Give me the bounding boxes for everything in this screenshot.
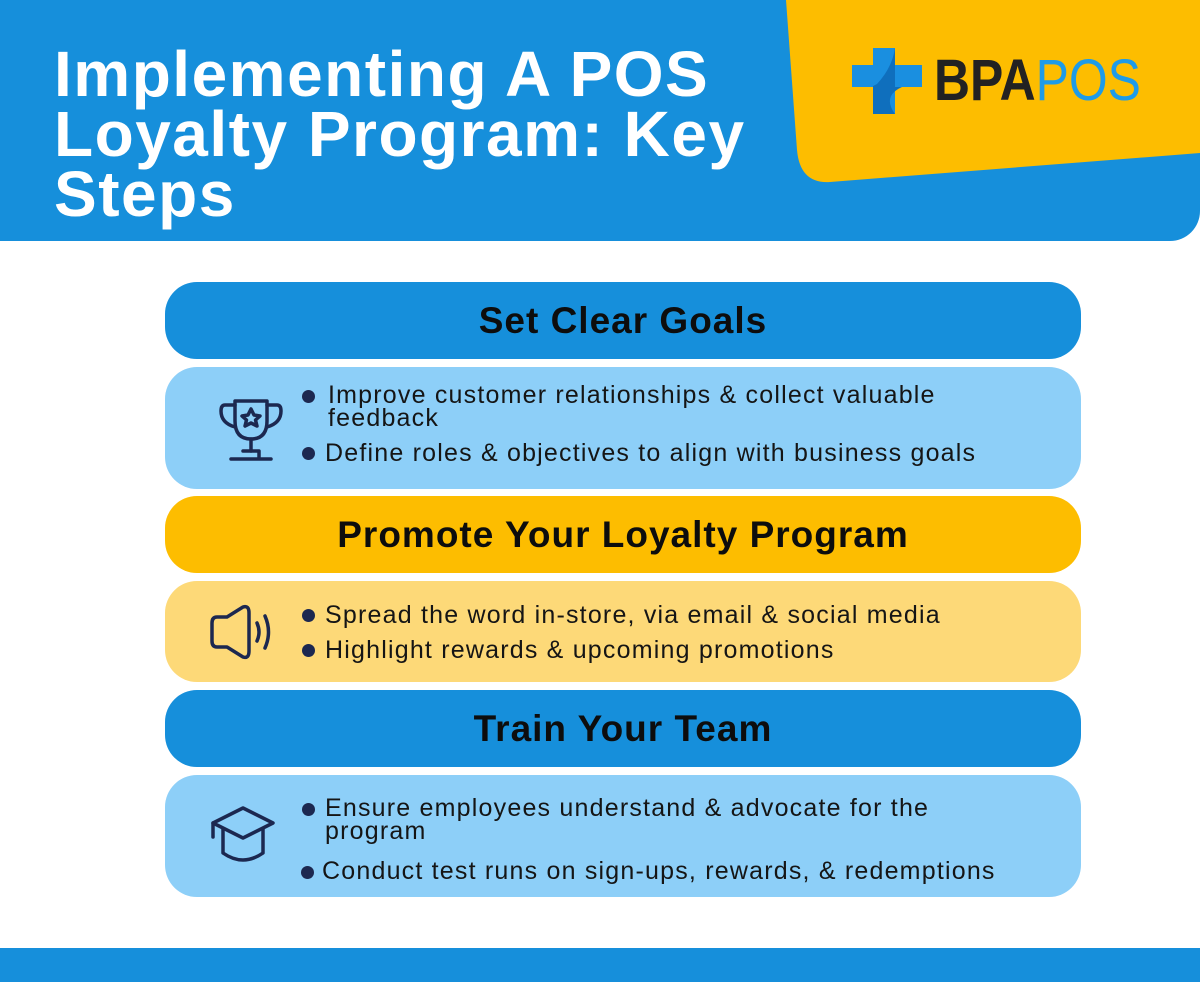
bullets <box>301 794 996 885</box>
icon: plus <box>852 48 922 114</box>
logo panel <box>786 0 1200 182</box>
bullets <box>302 601 941 664</box>
panel: train: Conduct test runs on sign-ups, rewards, & redemptions <box>322 857 996 885</box>
panel: goals: Improve customer relationships & collect valuable <box>328 381 936 409</box>
panel: train: Ensure employees understand & advocate for the <box>325 794 929 822</box>
panel: train <box>165 775 1081 897</box>
footer bar <box>0 948 1200 982</box>
icon: megaphone <box>210 604 270 660</box>
heading: Set Clear Goals: Set Clear Goals <box>479 300 767 340</box>
panel: goals <box>165 367 1081 489</box>
panel: goals: Define roles & objectives to align with business goals <box>325 439 976 467</box>
panel: goals: feedback <box>328 404 439 432</box>
panel: train: program <box>325 817 426 845</box>
heading: Promote: Promote Your Loyalty Program <box>337 514 909 554</box>
logo <box>852 48 1141 114</box>
logo text: BPAPOS <box>934 48 1141 113</box>
header band <box>0 0 1200 241</box>
heading: Train <box>165 690 1081 767</box>
bullets <box>302 381 976 467</box>
title: Implementing A POS Loyalty Program: Key Steps <box>54 38 746 230</box>
heading: Promote <box>165 496 1081 573</box>
heading: Train: Train Your Team <box>474 708 772 748</box>
panel: promote <box>165 581 1081 682</box>
heading: Set Clear Goals <box>165 282 1081 359</box>
icon: graduation cap <box>211 806 275 862</box>
panel: promote: Highlight rewards & upcoming promotions <box>325 636 835 664</box>
icon: trophy <box>219 399 283 461</box>
panel: promote: Spread the word in-store, via email & social media <box>325 601 941 629</box>
